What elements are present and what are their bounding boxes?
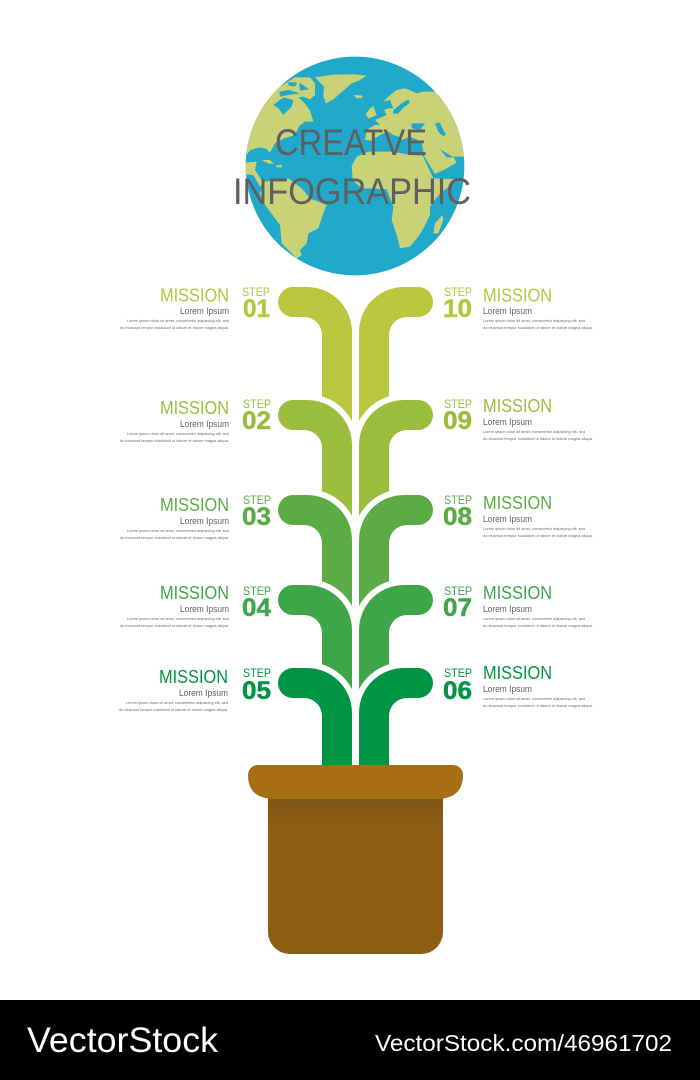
step 10 label [443, 284, 593, 330]
step 07 label: Lorem ipsum dolor sit amet, consectetur adipiscing elit, sed [483, 616, 585, 621]
title [233, 122, 471, 212]
branch 10 [359, 287, 433, 430]
branch 07 [359, 585, 433, 698]
step 01 label: Lorem Ipsum [180, 306, 229, 316]
step 08 label: 08 [443, 503, 472, 531]
step 06 label: MISSION [483, 662, 552, 683]
step 01 label [120, 284, 270, 330]
branch 04 [278, 585, 352, 698]
step 02 label: Lorem Ipsum [180, 419, 229, 429]
step 06 label: Lorem ipsum dolor sit amet, consectetur adipiscing elit, sed [483, 696, 585, 701]
step 10 label: STEP [444, 285, 472, 299]
step 09 label: STEP [444, 397, 472, 411]
step 01 label: STEP [242, 285, 270, 299]
flower pot [248, 765, 463, 954]
branch 09 [359, 400, 433, 525]
footer brand: VectorStock [27, 1021, 219, 1060]
step 02 label: STEP [243, 397, 271, 411]
step 04 label: do eiusmod tempor incididunt ut labore et dolore magna aliqua. [120, 623, 229, 628]
step 10 label: Lorem Ipsum [483, 306, 532, 316]
branch 08 [359, 495, 433, 615]
step 04 label: STEP [243, 584, 271, 598]
step 04 label: Lorem Ipsum [180, 604, 229, 614]
step 06 label: do eiusmod tempor incididunt ut labore et dolore magna aliqua. [483, 703, 593, 708]
step 03 label: STEP [243, 493, 271, 507]
step 04 label [120, 582, 271, 628]
step 01 label: 01 [243, 295, 270, 323]
branch 05 [278, 668, 352, 770]
globe [240, 57, 480, 275]
step 10 label: do eiusmod tempor incididunt ut labore et dolore magna aliqua. [483, 325, 593, 330]
step 10 label: 10 [443, 295, 472, 323]
step 06 label: 06 [443, 677, 472, 705]
branch 02 [278, 400, 352, 525]
step 10 label: Lorem ipsum dolor sit amet, consectetur adipiscing elit, sed [483, 318, 585, 323]
step 05 label: Lorem Ipsum [179, 688, 228, 698]
branch 01 [278, 287, 352, 430]
step 02 label: Lorem ipsum dolor sit amet, consectetur adipiscing elit, sed [127, 431, 229, 436]
step 08 label: Lorem Ipsum [483, 514, 532, 524]
step 07 label [443, 582, 593, 628]
step 03 label: do eiusmod tempor incididunt ut labore et dolore magna aliqua. [120, 535, 229, 540]
step 04 label: MISSION [160, 582, 229, 603]
step 03 label: 03 [242, 503, 271, 531]
step 09 label: MISSION [483, 395, 552, 416]
step 08 label: Lorem ipsum dolor sit amet, consectetur adipiscing elit, sed [483, 526, 585, 531]
step 02 label [120, 397, 271, 443]
step 03 label: MISSION [160, 494, 229, 515]
title: INFOGRAPHIC [233, 171, 471, 212]
step 09 label: Lorem Ipsum [483, 417, 532, 427]
step 06 label [443, 662, 593, 708]
step 02 label: 02 [242, 407, 271, 435]
step 05 label: Lorem ipsum dolor sit amet, consectetur adipiscing elit, sed [126, 700, 228, 705]
step 08 label: do eiusmod tempor incididunt ut labore et dolore magna aliqua. [483, 533, 593, 538]
footer bar [0, 1000, 700, 1080]
title: CREATVE [275, 122, 427, 163]
branch 06 [359, 668, 433, 770]
branch 03 [278, 495, 352, 615]
step 03 label [120, 493, 271, 540]
step 09 label [443, 395, 593, 441]
step 02 label: MISSION [160, 397, 229, 418]
step 09 label: do eiusmod tempor incididunt ut labore et dolore magna aliqua. [483, 436, 593, 441]
plant stems and branches [278, 287, 433, 770]
step 03 label: Lorem ipsum dolor sit amet, consectetur adipiscing elit, sed [127, 528, 229, 533]
step 05 label: 05 [242, 677, 271, 705]
step 05 label: do eiusmod tempor incididunt ut labore et dolore magna aliqua. [119, 707, 228, 712]
footer url: VectorStock.com/46961702 [375, 1030, 672, 1056]
step 04 label: 04 [242, 594, 271, 622]
step 05 label: MISSION [159, 666, 228, 687]
step 01 label: do eiusmod tempor incididunt ut labore et dolore magna aliqua. [120, 325, 229, 330]
step 01 label: MISSION [160, 284, 229, 306]
step 06 label: Lorem Ipsum [483, 684, 532, 694]
step 05 label [119, 666, 271, 712]
step 07 label: MISSION [483, 582, 552, 603]
step 07 label: do eiusmod tempor incididunt ut labore et dolore magna aliqua. [483, 623, 593, 628]
step 05 label: STEP [243, 666, 271, 680]
step 02 label: do eiusmod tempor incididunt ut labore et dolore magna aliqua. [120, 438, 229, 443]
step 06 label: STEP [444, 666, 472, 680]
step 07 label: STEP [444, 584, 472, 598]
step 01 label: Lorem ipsum dolor sit amet, consectetur adipiscing elit, sed [127, 318, 229, 323]
step 07 label: Lorem Ipsum [483, 604, 532, 614]
step 08 label: MISSION [483, 492, 552, 513]
step 03 label: Lorem Ipsum [180, 516, 229, 526]
step 09 label: Lorem ipsum dolor sit amet, consectetur adipiscing elit, sed [483, 429, 585, 434]
pot body [268, 795, 443, 954]
step 08 label: STEP [444, 493, 472, 507]
step 07 label: 07 [443, 594, 472, 622]
step 09 label: 09 [443, 407, 472, 435]
step 04 label: Lorem ipsum dolor sit amet, consectetur adipiscing elit, sed [127, 616, 229, 621]
pot rim [248, 765, 463, 799]
step 08 label [443, 492, 593, 538]
step 10 label: MISSION [483, 284, 552, 306]
